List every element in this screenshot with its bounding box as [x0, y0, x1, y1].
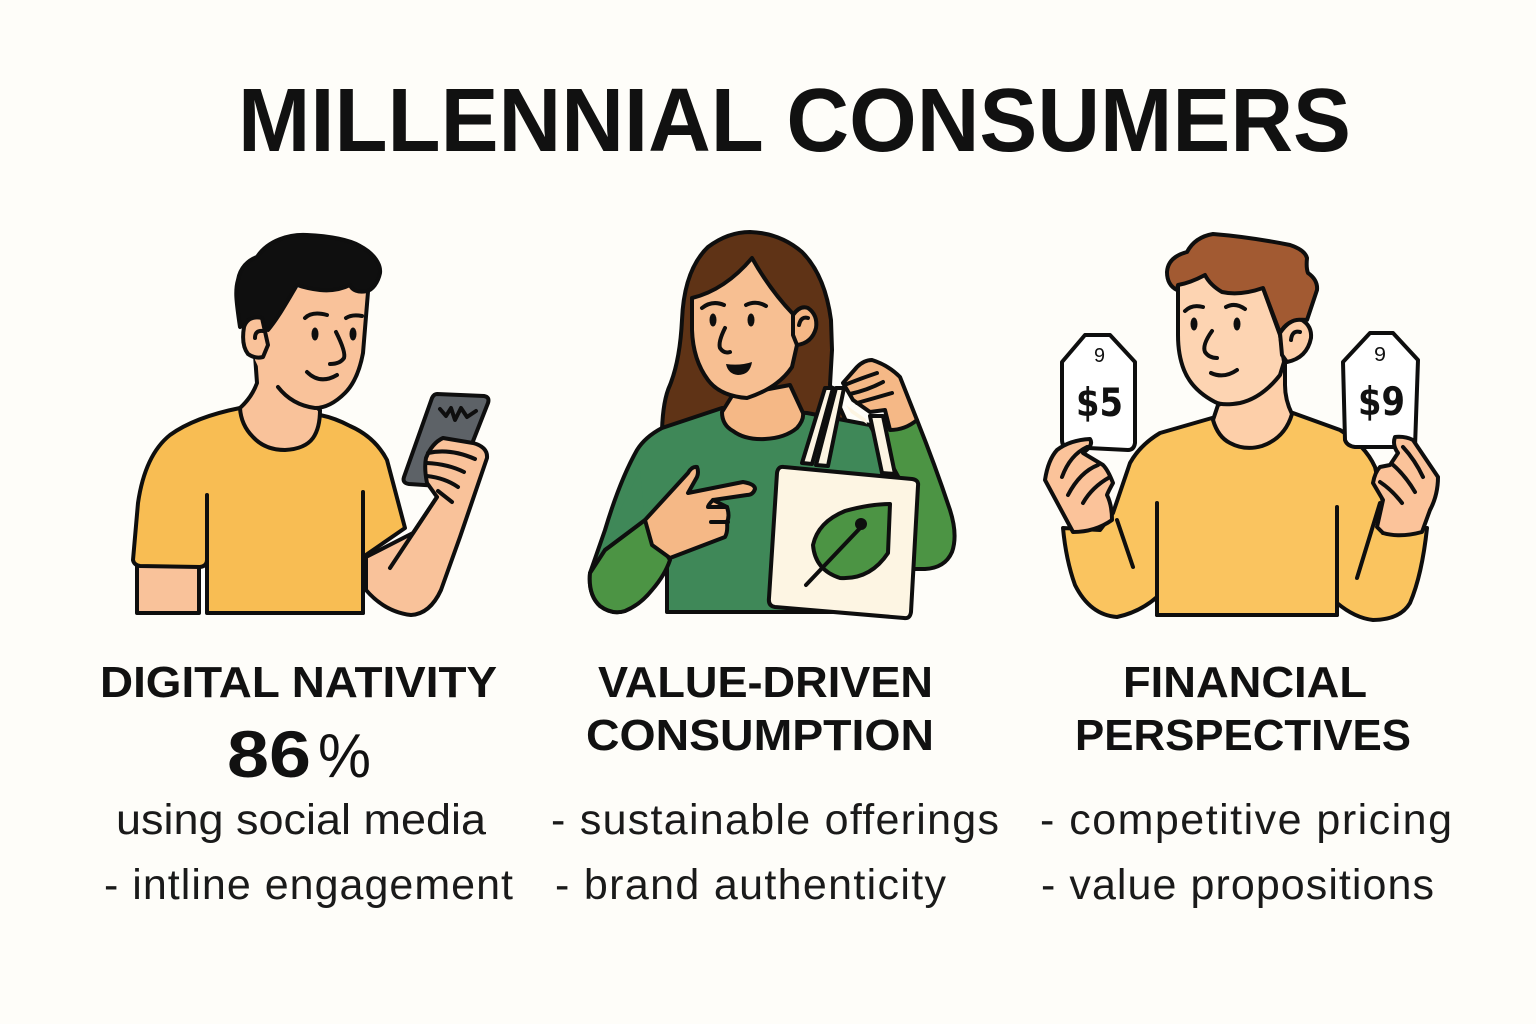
bullet line: - competitive pricing: [1040, 796, 1452, 844]
leaf logo: [813, 504, 890, 578]
face features: [1185, 305, 1245, 375]
title: MILLENNIAL CONSUMERS: [238, 71, 1351, 171]
bullet line: - brand authenticity: [555, 861, 946, 909]
face: [692, 258, 797, 398]
hair: [236, 235, 380, 330]
head: [1178, 275, 1284, 404]
left hand: [1045, 439, 1113, 532]
column 3: financial perspectives text: [1040, 658, 1452, 909]
tote bag: [769, 467, 918, 618]
heading: VALUE-DRIVEN: [598, 658, 933, 707]
price tag: $9: [1343, 333, 1418, 447]
collar and seams: [1117, 503, 1380, 615]
illustration: man with price tags: [1045, 234, 1438, 620]
ear: [1280, 320, 1311, 362]
text line: using social media: [116, 796, 486, 844]
ear: [243, 317, 268, 358]
price tag: $5: [1062, 335, 1135, 450]
price tag: $5: $5: [1076, 381, 1123, 426]
neck: [722, 385, 803, 439]
forearm and hand: [366, 438, 487, 615]
hair: [1167, 234, 1317, 333]
heading: DIGITAL NATIVITY: [100, 658, 497, 707]
statistic percent sign: %: [318, 722, 371, 791]
illustration: man with smartphone: [133, 235, 488, 615]
illustration: woman with tote bag: [590, 232, 955, 618]
facial features: [702, 303, 766, 375]
shirt seams: [205, 495, 209, 565]
bare left arm: [137, 565, 199, 613]
right sleeve: [880, 420, 955, 569]
t-shirt: [133, 408, 405, 613]
face features: [305, 314, 362, 379]
price tag: $9: 9: [1374, 344, 1386, 366]
long hair: [662, 232, 850, 430]
white gap under right tag: [1368, 448, 1396, 464]
statistic: 86: [227, 717, 311, 791]
fingers: [428, 451, 475, 459]
ear: [793, 307, 816, 345]
heading: FINANCIAL: [1123, 658, 1367, 707]
sweater: [1063, 413, 1427, 620]
left sleeve: [590, 520, 670, 612]
raised hand: [843, 360, 917, 430]
phone screen scribble: [440, 408, 476, 420]
bullet line: - intline engagement: [104, 861, 513, 909]
column 2: value-driven consumption text: CONSUMPTION: [586, 711, 934, 760]
price tag: $5: 9: [1094, 345, 1105, 367]
neck: [240, 355, 320, 450]
pointing hand: [645, 467, 755, 558]
neck: [1213, 362, 1292, 448]
column 1: digital nativity text: [100, 658, 513, 909]
column 3: financial perspectives text: PERSPECTIVES: [1075, 711, 1411, 760]
leaf stem: [806, 525, 863, 585]
bullet line: - sustainable offerings: [551, 796, 999, 844]
price tag: $9: $9: [1358, 380, 1405, 425]
smartphone: [404, 394, 488, 487]
face outline: [278, 292, 368, 408]
right hand: [1373, 437, 1438, 535]
column 2: value-driven consumption text: [551, 658, 999, 909]
bag handles: [802, 388, 895, 474]
bullet line: - value propositions: [1041, 861, 1434, 909]
sweater: [590, 408, 900, 612]
head fill: [255, 285, 368, 408]
